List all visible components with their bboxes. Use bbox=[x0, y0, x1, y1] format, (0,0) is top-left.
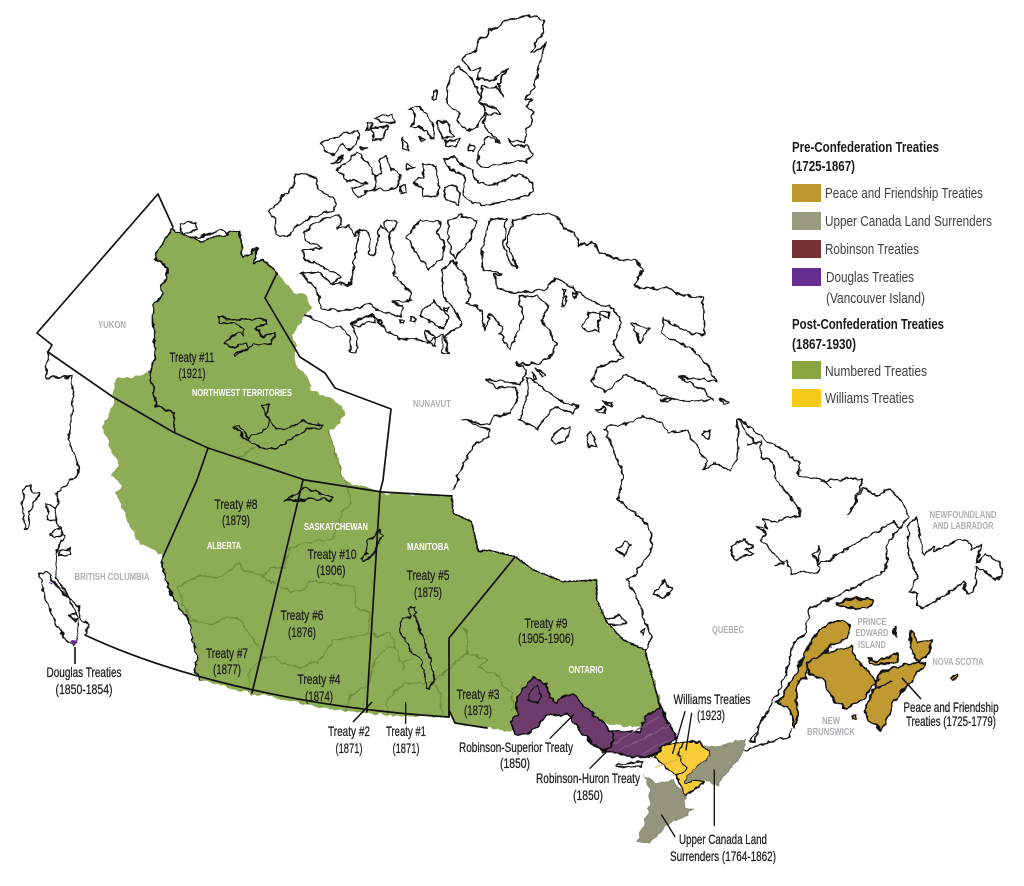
northern boundaries and coast bbox=[37, 194, 677, 738]
Bathurst Island bbox=[375, 155, 400, 190]
east coast bbox=[750, 478, 908, 742]
leader line: Treaty 1 bbox=[404, 703, 408, 723]
treaty labels: Treaty #6 bbox=[280, 607, 324, 623]
legend item: Douglas: (Vancouver Island) bbox=[826, 290, 925, 307]
treaty labels: Treaty #9 bbox=[524, 615, 568, 631]
province labels on map: SASKATCHEWAN bbox=[304, 521, 368, 533]
treaty labels: (1905-1906) bbox=[518, 630, 574, 646]
Robinson-Superior Treaty bbox=[510, 677, 613, 750]
Peace and Friendship: PEI bbox=[868, 653, 898, 665]
leader line: Peace and Friendship bbox=[902, 678, 921, 699]
province labels on map: PRINCE bbox=[858, 616, 886, 628]
Robinson-Huron Treaty bbox=[603, 707, 677, 758]
Somerset Island bbox=[448, 215, 477, 258]
treaty labels: Treaty #8 bbox=[214, 496, 258, 512]
treaty labels: Douglas Treaties bbox=[46, 664, 122, 680]
legend item: Robinson bbox=[792, 240, 919, 258]
Lake Mistassini bbox=[730, 538, 753, 560]
Upper Canada Land Surrenders south bbox=[637, 775, 695, 843]
province labels on map: QUEBEC bbox=[712, 624, 744, 636]
legend item: Williams bbox=[792, 389, 914, 407]
legend heading: post-Confederation: (1867-1930) bbox=[792, 336, 856, 353]
legend item: Peace and Friendship: Peace and Friendship Treaties bbox=[825, 185, 983, 202]
treaty labels: Treaty #2 bbox=[328, 723, 370, 739]
treaty labels: (1873) bbox=[464, 702, 492, 718]
treaty labels bbox=[46, 349, 999, 864]
Ellesmere Island bbox=[462, 15, 545, 167]
Peace and Friendship: Anticosti bbox=[837, 598, 875, 609]
Labrador and Atlantic bbox=[745, 478, 1002, 750]
Axel Heiberg Island bbox=[447, 67, 487, 130]
legend item: Upper Canada bbox=[792, 212, 992, 230]
Prince Patrick Island bbox=[320, 132, 358, 155]
treaty labels: Robinson-Superior Treaty bbox=[459, 739, 573, 755]
BC coast bbox=[53, 470, 88, 635]
treaty labels: (1850) bbox=[500, 755, 530, 771]
Prince of Wales Island bbox=[407, 220, 443, 270]
territory and province labels bbox=[46, 319, 999, 864]
treaty labels: (1906) bbox=[316, 562, 346, 578]
Williams divider bbox=[675, 742, 687, 777]
treaty labels: Treaty #1 bbox=[386, 723, 426, 739]
province labels on map: NOVA SCOTIA bbox=[932, 656, 984, 668]
small Atlantic islands bbox=[852, 674, 957, 719]
northern Quebec coast bbox=[605, 416, 830, 598]
Ontario and James Bay region bbox=[510, 580, 745, 843]
Newfoundland bbox=[908, 517, 1002, 608]
legend heading: pre-Confederation: (1725-1867) bbox=[792, 158, 855, 175]
province labels on map: ONTARIO bbox=[568, 664, 604, 676]
treaty labels: (1877) bbox=[213, 661, 241, 677]
northern BC coast bbox=[47, 352, 80, 480]
treaty labels: Williams Treaties bbox=[674, 691, 750, 707]
James Bay coast bbox=[627, 580, 652, 650]
legend heading: pre-Confederation bbox=[792, 139, 939, 175]
treaty labels: (1871) bbox=[392, 740, 420, 756]
Banks Island bbox=[268, 173, 335, 237]
legend bbox=[792, 139, 992, 407]
treaty labels: (1879) bbox=[222, 512, 250, 528]
legend heading: post-Confederation: Post-Confederation Treaties bbox=[792, 316, 944, 333]
treaty labels: (1875) bbox=[414, 584, 442, 600]
small bay islands bbox=[617, 430, 710, 598]
province labels on map: ALBERTA bbox=[207, 540, 241, 552]
legend heading: pre-Confederation: Pre-Confederation Treaties bbox=[792, 139, 939, 156]
Quebec-Labrador boundary bbox=[738, 418, 830, 575]
central Arctic and mainland coast bbox=[302, 213, 728, 490]
treaty labels: (1874) bbox=[305, 688, 333, 704]
Southern Quebec line bbox=[745, 728, 792, 750]
province labels on map: NORTHWEST TERRITORIES bbox=[192, 387, 292, 399]
Williams Treaties bbox=[653, 742, 712, 797]
Haida Gwaii bbox=[23, 485, 40, 528]
Lake Nipigon bbox=[528, 687, 542, 703]
north Labrador coast bbox=[738, 418, 830, 487]
treaty labels: Robinson-Huron Treaty bbox=[536, 770, 640, 786]
James Bay islands bbox=[605, 615, 645, 635]
treaty labels: Treaty #11 bbox=[170, 349, 215, 365]
Douglas Treaties fill bbox=[70, 639, 77, 647]
lake: Winnipeg bbox=[400, 607, 435, 688]
province labels on map: EDWARD bbox=[856, 627, 889, 639]
leader line: Upper Canada bbox=[662, 770, 714, 837]
leader line: Douglas Treaties bbox=[74, 647, 76, 664]
Williams hatch bbox=[657, 757, 683, 767]
treaty labels: Treaty #10 bbox=[308, 546, 357, 562]
Hudson Bay and Ungava coast bbox=[605, 416, 738, 580]
mainland arctic coast bbox=[303, 260, 557, 490]
legend item: Peace and Friendship bbox=[792, 184, 983, 202]
legend item: Numbered: Numbered Treaties bbox=[825, 363, 927, 380]
treaty labels: (1850) bbox=[573, 787, 603, 803]
Victoria Island bbox=[303, 215, 360, 285]
internal treaty boundaries bbox=[178, 430, 513, 715]
legend item: Williams: Williams Treaties bbox=[825, 390, 914, 407]
province labels on map bbox=[74, 319, 997, 738]
BC coast and Vancouver Island bbox=[23, 470, 88, 647]
Arctic islands north bbox=[268, 15, 545, 237]
legend item: Douglas bbox=[792, 268, 925, 307]
treaty labels: Surrenders (1764-1862) bbox=[670, 848, 776, 864]
treaty labels: Treaty #3 bbox=[456, 686, 500, 702]
King William Island bbox=[420, 300, 448, 328]
legend heading: post-Confederation bbox=[792, 316, 944, 353]
treaty labels: (1871) bbox=[336, 740, 362, 756]
Devon Island bbox=[443, 157, 533, 205]
Labrador boundary south bbox=[825, 522, 900, 562]
treaty labels: Treaty #7 bbox=[206, 645, 248, 661]
province labels on map: MANITOBA bbox=[407, 541, 449, 553]
lake: Reindeer bbox=[360, 530, 383, 562]
Peace and Friendship: Nova Scotia bbox=[865, 663, 925, 730]
Foxe Basin and Hudson Strait islands bbox=[532, 288, 728, 447]
treaty labels: (1850-1854) bbox=[56, 681, 112, 697]
Cornwallis and small islands bbox=[332, 92, 473, 205]
province labels on map: BRITISH COLUMBIA bbox=[74, 571, 150, 583]
legend item: Douglas: Douglas Treaties bbox=[826, 269, 914, 286]
lake: Great Bear bbox=[218, 317, 275, 357]
Magdalen Islands bbox=[892, 625, 897, 637]
treaty labels: Treaty #4 bbox=[298, 671, 341, 687]
Upper Canada Land Surrenders east bbox=[685, 740, 745, 785]
Melville Island bbox=[337, 153, 377, 197]
Peace and Friendship: New Brunswick bbox=[807, 645, 875, 708]
legend item: Numbered bbox=[792, 361, 927, 380]
Southampton Island bbox=[520, 377, 578, 428]
leader line: Williams bbox=[673, 712, 692, 753]
leader line: Robinson-Huron bbox=[590, 752, 607, 768]
Ontario leader lines bbox=[406, 703, 714, 837]
treaty labels: Upper Canada Land bbox=[679, 831, 767, 847]
numbered treaties region bbox=[102, 227, 663, 732]
coastal islands bbox=[47, 503, 78, 622]
Baffin Island bbox=[482, 213, 717, 402]
treaty labels: (1923) bbox=[697, 707, 725, 723]
treaty labels: Treaty #5 bbox=[406, 567, 450, 583]
province labels on map: AND LABRADOR bbox=[932, 520, 994, 532]
province labels on map: NUNAVUT bbox=[413, 398, 451, 410]
province labels on map: ISLAND bbox=[858, 639, 886, 651]
Victoria Island south bbox=[302, 218, 412, 317]
treaty labels: (1921) bbox=[178, 365, 206, 381]
leader line: Treaty 2 bbox=[353, 702, 372, 722]
Robinson-Huron hatch bbox=[613, 717, 675, 755]
province labels on map: BRUNSWICK bbox=[807, 726, 855, 738]
province labels on map: YUKON bbox=[98, 319, 126, 331]
province labels on map: NEW bbox=[822, 715, 840, 727]
lake: Athabasca bbox=[285, 488, 333, 501]
legend item: Robinson: Robinson Treaties bbox=[825, 241, 919, 258]
Vancouver Island bbox=[39, 572, 78, 647]
Peace and Friendship: Gaspe bbox=[777, 620, 850, 728]
lake: Great Slave bbox=[233, 405, 323, 448]
province labels on map: NEWFOUNDLAND bbox=[930, 509, 997, 521]
leader line: Robinson-Superior bbox=[550, 715, 573, 738]
Peace and Friendship: Cape Breton bbox=[910, 630, 932, 662]
Manitoulin Island bbox=[616, 762, 642, 767]
small central islands bbox=[352, 307, 449, 345]
treaty labels: (1876) bbox=[288, 624, 316, 640]
